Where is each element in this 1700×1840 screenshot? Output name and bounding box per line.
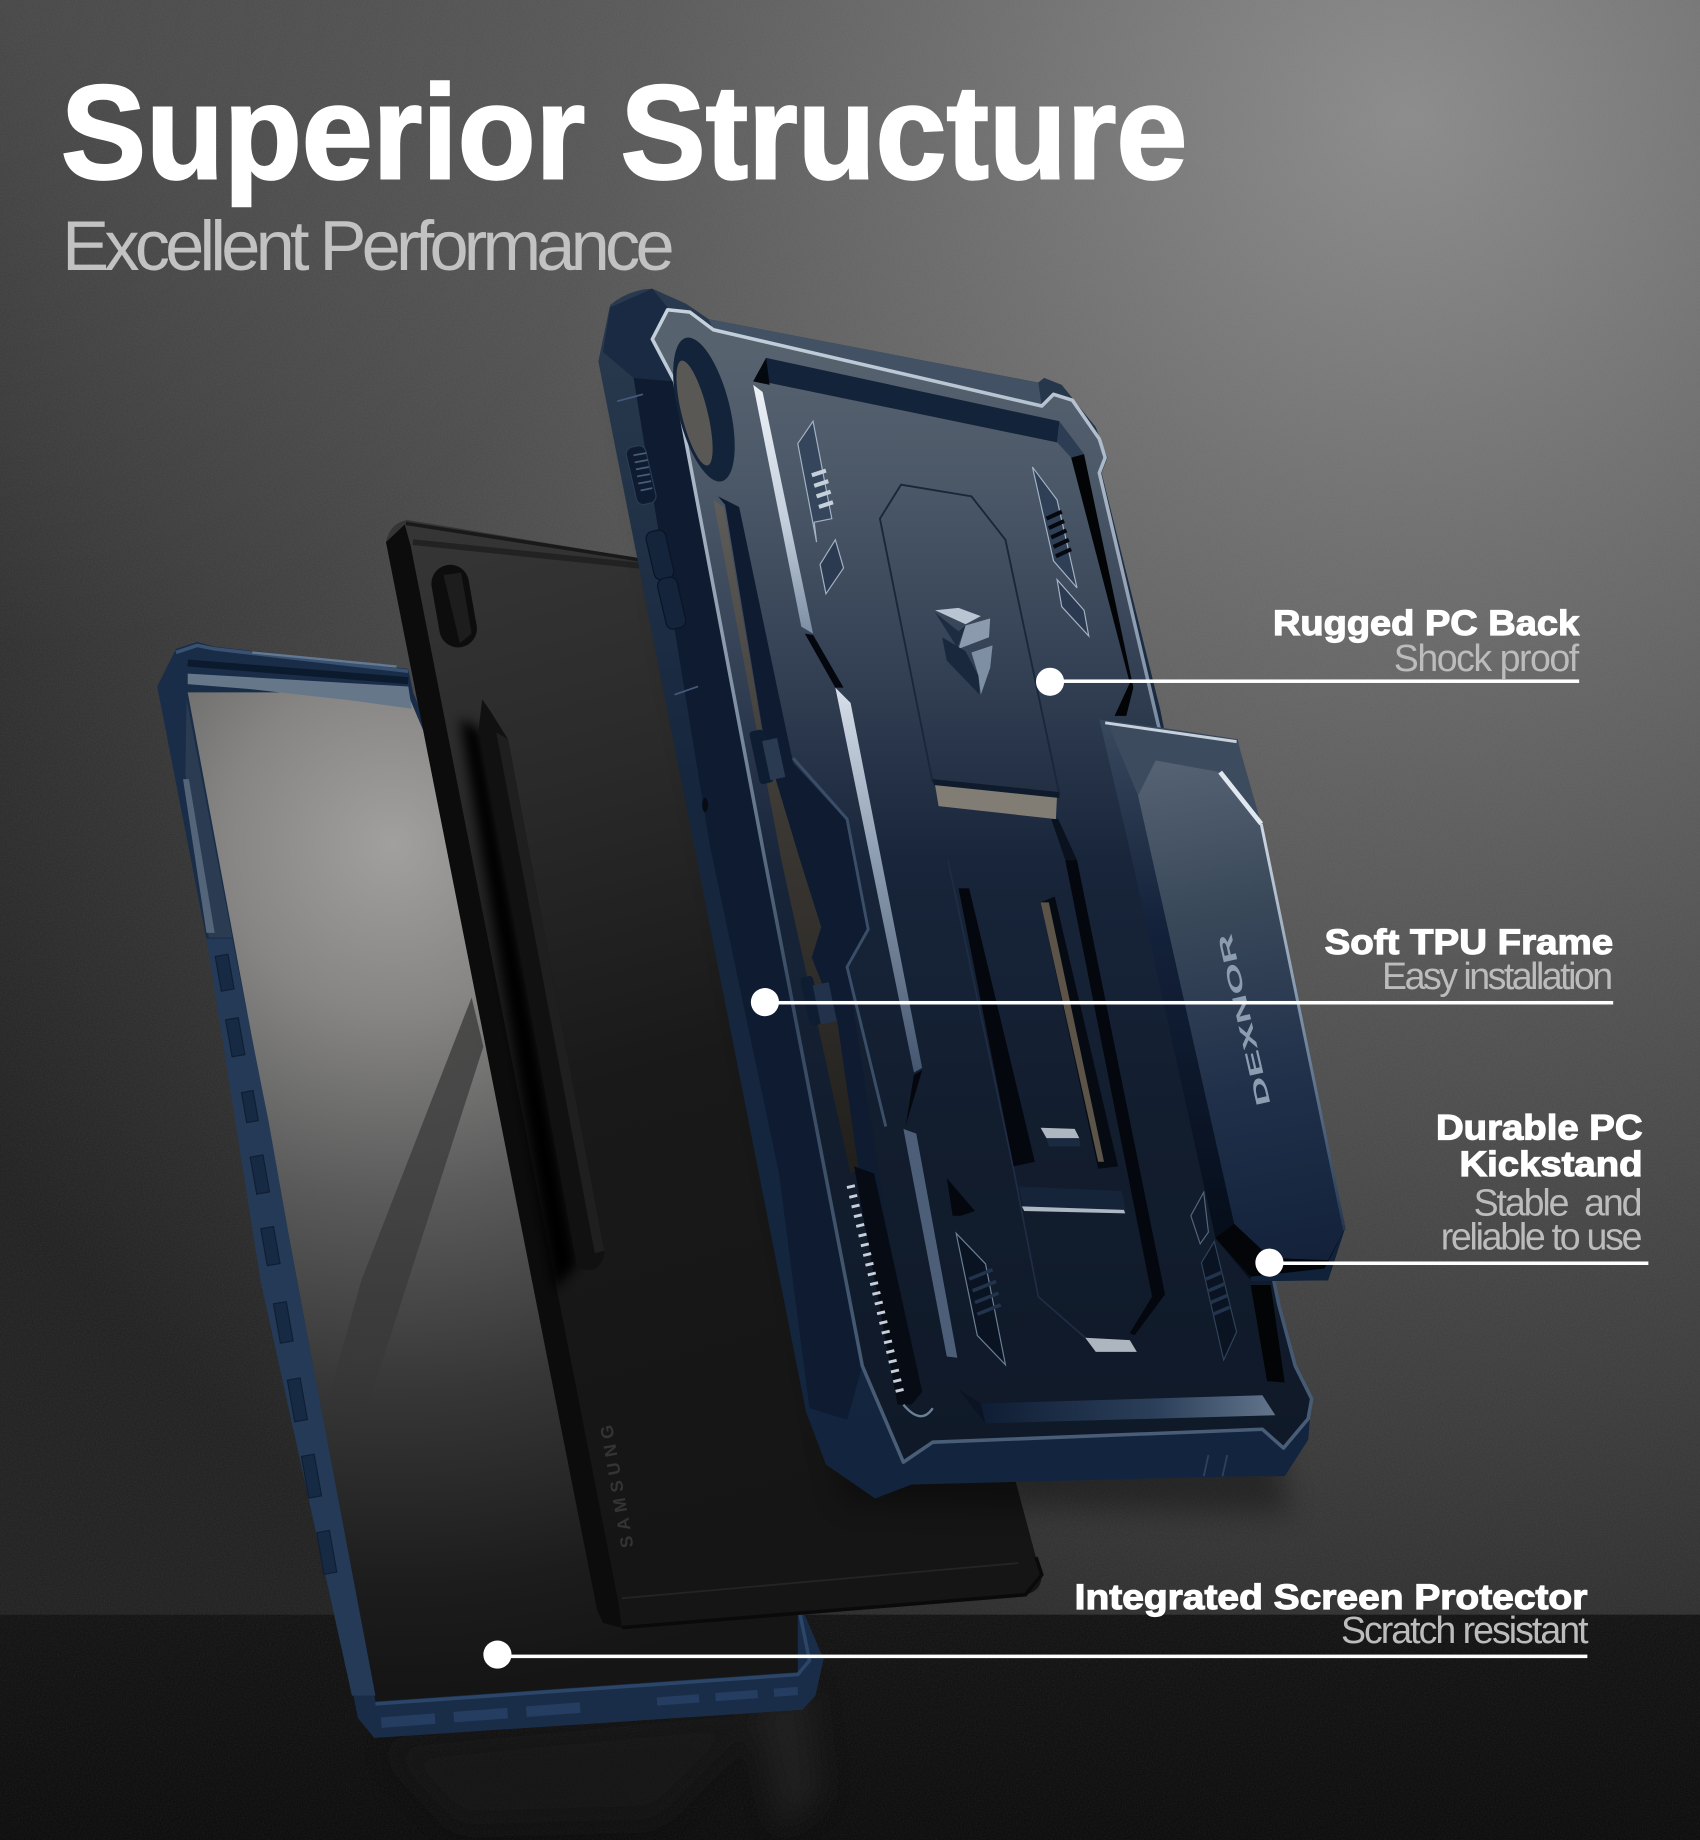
lower right vent (1191, 1192, 1237, 1360)
recess corner (753, 358, 770, 385)
s pen (479, 699, 604, 1270)
kickstand plate (1099, 719, 1345, 1281)
plate upper face (1109, 725, 1261, 824)
callout: durable pc kickstand: reliable to use (1441, 1216, 1643, 1258)
right black strip (1071, 454, 1133, 716)
callout: rugged pc back (1036, 604, 1580, 696)
tablet camera (428, 562, 480, 650)
transparent frame sliver (185, 699, 232, 938)
right recess facet (1057, 421, 1084, 458)
callout: soft tpu frame (751, 923, 1613, 1016)
title: Superior Structure (61, 58, 1187, 207)
rugged case back (598, 289, 1345, 1514)
case outer body (598, 289, 1312, 1499)
tablet top edge (406, 523, 774, 581)
side buttons (625, 444, 687, 630)
kickstand hinge strip (935, 785, 1057, 819)
tablet (386, 520, 1042, 1628)
s pen shadow (460, 718, 577, 1291)
callout: durable pc kickstand: Kickstand (1459, 1145, 1643, 1184)
frame top edge (176, 645, 408, 681)
plate top highlight (1105, 723, 1237, 742)
samsung logo: SAMSUNG (596, 1423, 637, 1549)
kickstand slit left (959, 888, 1035, 1166)
plate bright edge (1220, 772, 1261, 824)
bottom frame details (375, 1615, 810, 1723)
frame light streak (183, 779, 215, 933)
top face (709, 319, 1042, 406)
bright panel strip lower (903, 1129, 957, 1358)
brand on kickstand: DEXNOR (1214, 932, 1275, 1108)
side clips (749, 729, 837, 1026)
callout: rugged pc back: Shock proof (1394, 637, 1580, 679)
kickstand clip (1041, 1128, 1081, 1146)
bottom recess band (959, 1389, 1275, 1423)
bottom side detail (1204, 1455, 1227, 1476)
side wall markers (617, 394, 698, 695)
side cut-out showing through (713, 500, 859, 1173)
ridge grip strip (851, 1166, 933, 1416)
plate right edge (1261, 824, 1345, 1230)
frame grip segments (215, 954, 337, 1574)
callout: soft tpu frame: Easy installation (1382, 955, 1613, 997)
dark floor band (0, 1615, 1700, 1840)
plate lip (1251, 1230, 1345, 1281)
kickstand tip (1085, 1338, 1137, 1352)
panel notch (805, 634, 844, 688)
central lower outline (948, 860, 1085, 1338)
screen protector frame (157, 642, 824, 1738)
frame body (157, 642, 824, 1738)
kickstand lower bar (1018, 1186, 1126, 1213)
callout: integrated screen protector: Integrated Screen Protector (1075, 1578, 1588, 1617)
callout: rugged pc back: Rugged PC Back (1273, 604, 1580, 643)
lower right black strip (1251, 1285, 1285, 1382)
callout: durable pc kickstand: Stable and (1474, 1182, 1643, 1224)
plate flat (1099, 719, 1345, 1280)
glass diagonal reflection (319, 997, 483, 1432)
rim and panel face (652, 310, 1312, 1462)
plate raised face (1138, 760, 1345, 1260)
callout: durable pc kickstand (1255, 1108, 1648, 1277)
side wall dark strip (634, 378, 862, 1420)
top slot hole (661, 332, 747, 488)
callout: integrated screen protector (483, 1578, 1589, 1669)
frame grip strip (206, 939, 375, 1696)
logo emblem (935, 608, 993, 695)
side slot rim line (793, 758, 886, 1127)
callout: durable pc kickstand: Durable PC (1436, 1108, 1643, 1147)
side slot wall (718, 496, 912, 1405)
case shadow (622, 387, 1291, 1514)
top recess band (753, 358, 1059, 442)
floor reflection (387, 1690, 821, 1831)
upper right vent (1032, 467, 1089, 636)
glass top tint (188, 674, 412, 709)
side small port (702, 798, 708, 812)
tablet lower edge (622, 1557, 1042, 1628)
tablet side strip (386, 525, 622, 1628)
screen glass (188, 692, 798, 1702)
corner bumper facet (603, 289, 675, 381)
bright panel strip middle (835, 688, 922, 1073)
callout: soft tpu frame: Soft TPU Frame (1325, 923, 1613, 962)
plate black facet (1215, 1224, 1345, 1277)
kickstand slit right (1041, 897, 1118, 1169)
subtitle: Excellent Performance (62, 206, 675, 285)
upper left vent (798, 421, 844, 594)
kickstand cavity edge (1065, 860, 1165, 1335)
callout: integrated screen protector: Scratch resistant (1341, 1609, 1589, 1651)
lower left vent (947, 1178, 1005, 1365)
central raised panel outline (880, 485, 1059, 794)
bright panel strip upper (753, 385, 813, 634)
panel notch lower (906, 1070, 922, 1125)
tablet body (386, 520, 1042, 1628)
